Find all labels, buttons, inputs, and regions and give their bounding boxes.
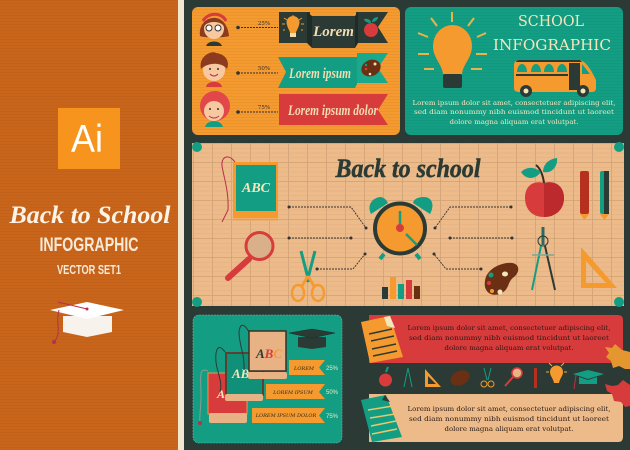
icon: beige ABC book (239, 325, 287, 379)
sidebar subtitle: INFOGRAPHIC (40, 235, 139, 256)
character: boy (201, 52, 228, 87)
dark ribbon: Lorem: Lorem (312, 24, 354, 40)
red ribbon: Lorem ipsum dolor (279, 94, 388, 125)
icon: teal note page (361, 395, 402, 442)
75% connector: 75% (258, 105, 270, 111)
icon: dark graduation cap (289, 329, 335, 349)
icon: Adobe Illustrator logo: Ai (71, 118, 103, 161)
icon: apple (364, 17, 378, 37)
icon: set square (581, 247, 617, 288)
title: School Infographic: INFOGRAPHIC (493, 36, 611, 54)
label: Lorem ipsum dolor 75%: LOREM IPSUM DOLOR (255, 413, 316, 419)
icon: scissors (292, 251, 324, 301)
dark ribbon: Lorem (279, 12, 388, 48)
icon: ABC book with bookmark (222, 157, 278, 222)
character: red-haired girl (200, 91, 230, 127)
icon: paint palette (485, 263, 518, 295)
panel: books and labels (193, 315, 342, 443)
teal ribbon: Lorem ipsum: Lorem ipsum (288, 66, 351, 82)
panel: characters and progress ribbons (192, 7, 400, 135)
red ribbon: Lorem ipsum dolor: Lorem ipsum dolor (287, 103, 378, 119)
icon: beige ABC book: ABC (255, 346, 282, 361)
panel: red text banner: sed diam nonummy nibh euismod tincidunt ut laoreet (409, 334, 609, 342)
panel: back to school grid (192, 142, 624, 307)
icon: school bus (514, 60, 596, 97)
icon: graduation cap (50, 302, 124, 344)
panel: red text banner: Lorem ipsum dolor sit amet, consectetuer adipiscing elit, (408, 324, 610, 332)
heading: Back to school: Back to school (335, 154, 481, 183)
label: Lorem ipsum 50%: LOREM IPSUM (272, 390, 314, 396)
icon: ABC book with bookmark: ABC (241, 181, 271, 196)
panel: cream text banner: dolore magna aliquam erat volutpat. (444, 425, 574, 433)
panel: red text banner (369, 315, 623, 363)
character: girl with glasses (200, 14, 229, 46)
50% connector: 50% (258, 66, 270, 72)
body text: Lorem ipsum dolor sit amet, consectetuer adipiscing elit, (412, 99, 616, 107)
icon: red book: A (216, 387, 225, 401)
icon: large light bulb (418, 12, 487, 88)
icon: paint palette (359, 57, 383, 79)
teal ribbon: Lorem ipsum (278, 53, 388, 88)
icon: green book: AB (231, 366, 250, 381)
body text: dolore magna aliquam erat volutpat. (450, 118, 578, 126)
icon: compass (532, 227, 555, 290)
label: Lorem ipsum dolor 75% (252, 408, 339, 423)
icon: light bulb (282, 15, 304, 37)
50% connector (236, 66, 278, 75)
panel: school infographic header (405, 7, 623, 135)
title: School Infographic (493, 12, 611, 54)
icon row: school items (379, 363, 604, 389)
panel: cream text banner: sed diam nonummy nibh euismod tincidunt ut laoreet (409, 415, 609, 423)
connector dots (288, 206, 514, 270)
icon: red autumn leaf (605, 380, 630, 407)
25% connector (236, 21, 278, 29)
icon: red book (198, 370, 247, 425)
75% connector (236, 105, 278, 114)
icon: red pencil (580, 171, 589, 220)
icon: magnifying glass (228, 232, 273, 278)
sidebar title: Back to School (8, 202, 171, 229)
label: Lorem 25% (289, 360, 339, 375)
icon: green book (216, 347, 263, 401)
25% connector: 25% (258, 21, 270, 27)
chart: small bar chart (382, 277, 420, 299)
icon: apple with leaves (521, 158, 564, 217)
panel: cream text banner: Lorem ipsum dolor sit amet, consectetuer adipiscing elit, (408, 405, 610, 413)
label: Lorem 25%: LOREM (293, 366, 315, 372)
connector lines (289, 207, 512, 269)
icon: green pencil (600, 171, 609, 220)
label: Lorem ipsum 50%: 50% (326, 390, 339, 396)
panel: cream text banner (369, 394, 623, 442)
icon: alarm clock (369, 197, 432, 259)
label: Lorem 25%: 25% (326, 366, 339, 372)
panel: red text banner: dolore magna aliquam erat volutpat. (444, 344, 574, 352)
panel: left sidebar (0, 0, 184, 450)
label: Lorem ipsum dolor 75%: 75% (326, 414, 339, 420)
label: Lorem ipsum 50% (266, 384, 339, 399)
icon: Adobe Illustrator logo (58, 108, 120, 169)
title: School Infographic: SCHOOL (518, 12, 584, 30)
icon: orange autumn leaf (605, 344, 630, 369)
corner clips (192, 142, 624, 307)
body text (412, 99, 616, 126)
icon: orange note page (361, 316, 403, 363)
sidebar vector set label: VECTOR SET1 (57, 262, 121, 277)
body text: sed diam nonummy nibh euismod tincidunt ut laoreet (414, 108, 614, 116)
